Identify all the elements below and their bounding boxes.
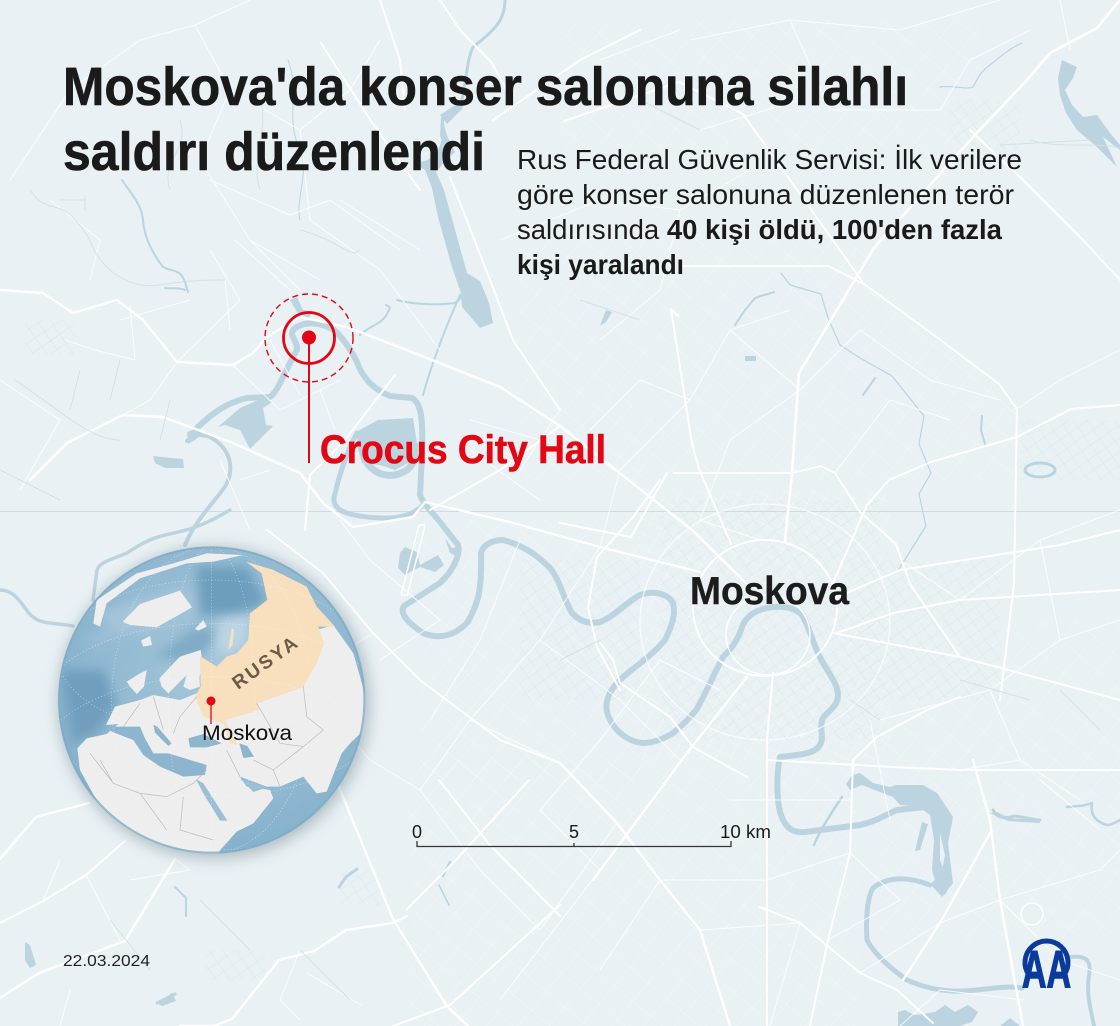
faint horizontal line <box>0 510 1120 512</box>
description text <box>517 144 1022 280</box>
Crocus City Hall marker <box>265 294 353 463</box>
Britain <box>127 670 147 694</box>
label: RUSYA: RUSYA <box>229 633 302 694</box>
outer dashed ring <box>265 294 353 382</box>
Russia <box>195 562 335 745</box>
south lakes <box>898 1005 978 1026</box>
White Sea inlets <box>228 628 234 650</box>
globe shadow <box>59 548 369 858</box>
country borders <box>90 687 323 840</box>
scale bar <box>412 822 771 846</box>
main Moskva river <box>197 323 935 832</box>
south-east loop <box>867 879 1022 991</box>
scale bar: 10 km <box>720 822 771 842</box>
inner ring <box>284 312 334 364</box>
Khimki reservoir <box>413 112 493 328</box>
north-east lake system <box>1058 60 1120 167</box>
western bay lakes <box>218 398 273 449</box>
label: Moskova: Moskova <box>690 570 849 613</box>
scale bar: 5 <box>569 822 579 842</box>
ocean depth shading <box>60 567 267 743</box>
title <box>63 57 908 182</box>
title: Moskova'da konser salonuna silahlı <box>63 57 908 117</box>
AA logo <box>1022 941 1071 999</box>
eastern small rivers <box>993 810 1040 820</box>
Arctic land <box>93 553 243 627</box>
Nagatino lake basin <box>846 773 953 897</box>
AA logo: AA <box>1022 941 1071 999</box>
ring roads of central Moscow <box>600 504 1043 925</box>
ring lake east <box>1025 463 1055 477</box>
south-west roads <box>0 803 89 859</box>
description text: saldırısında 40 kişi öldü, 100'den fazla <box>517 214 1003 245</box>
Svalbard <box>195 620 207 631</box>
globe marker <box>206 696 216 724</box>
river under globe <box>93 510 230 600</box>
Scandinavia <box>159 650 203 693</box>
graticule <box>61 546 362 853</box>
Mediterranean <box>108 727 207 777</box>
west river section <box>185 435 230 545</box>
leader line <box>308 338 310 463</box>
northern canal <box>443 0 505 120</box>
marker dot <box>302 330 316 344</box>
Greenland <box>123 591 192 627</box>
scale bar: 0 <box>412 822 422 842</box>
Stroginskaya lake <box>357 418 418 470</box>
label: Moskova on globe: Moskova <box>202 722 292 745</box>
Adriatic <box>153 725 172 746</box>
Black Sea <box>188 734 222 747</box>
title: saldırı düzenlendi <box>63 122 485 182</box>
Caspian Sea <box>239 743 254 758</box>
label: Crocus City Hall: Crocus City Hall <box>320 428 606 472</box>
Red Sea <box>196 779 227 821</box>
description text: Rus Federal Güvenlik Servisi: İlk verilere <box>517 144 1022 175</box>
Iceland <box>141 636 152 647</box>
description text: göre konser salonuna düzenlenen terör <box>517 179 1014 210</box>
description text: kişi yaralandı <box>517 249 684 280</box>
airfield ponds <box>398 547 444 575</box>
globe inset <box>38 547 385 858</box>
date: 22.03.2024 <box>63 953 150 970</box>
airfield strip <box>401 525 425 596</box>
north-west stream <box>122 180 188 292</box>
Persian Gulf <box>240 778 267 792</box>
ocean <box>58 547 365 853</box>
bend around Serebryany Bor <box>334 433 424 518</box>
globe map, coordinates scaled <box>58 546 366 854</box>
globe rim <box>59 547 364 853</box>
land mass Eurasia and Africa <box>77 625 367 858</box>
